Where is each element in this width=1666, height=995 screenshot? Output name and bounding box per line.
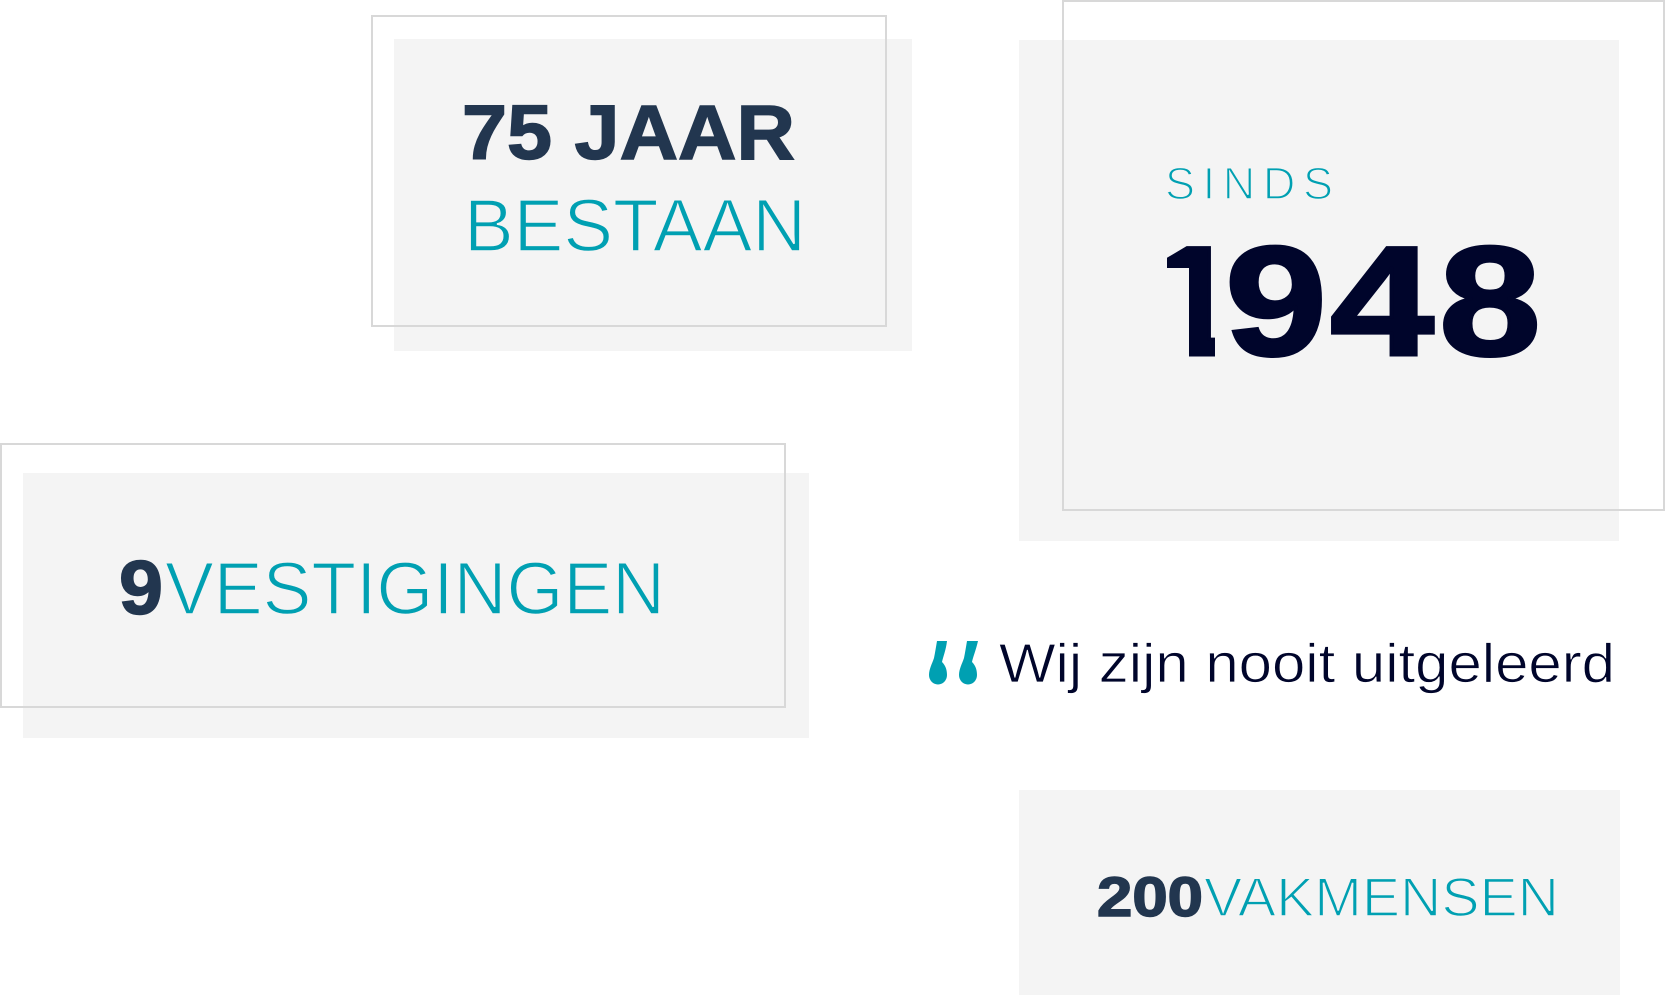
big year: 1948 — [1167, 244, 1538, 358]
number: 9: 9 — [119, 546, 163, 631]
quote — [929, 632, 1615, 694]
panel background — [394, 39, 912, 351]
label: vestigingen: VESTIGINGEN — [165, 547, 665, 630]
panel: sinds 1948 — [1019, 1, 1664, 541]
label: sinds: SINDS — [1165, 158, 1333, 209]
panel: 200 vakmensen — [1019, 790, 1620, 995]
panel background — [1019, 790, 1620, 995]
icon: quotation marks — [929, 641, 978, 685]
subheading: bestaan: BESTAAN — [464, 184, 806, 267]
heading: 75 jaar: 75 JAAR — [462, 90, 795, 176]
panel background — [23, 473, 809, 738]
panel background — [1019, 40, 1619, 541]
big year: 1948: 1 — [1146, 215, 1241, 389]
number: 200: 200 — [1097, 865, 1203, 928]
big year: 1948: 8 — [1439, 215, 1541, 389]
label: vakmensen: VAKMENSEN — [1204, 866, 1559, 928]
panel: 75 jaar bestaan — [372, 16, 912, 351]
big year: 1948: 9 — [1225, 215, 1327, 389]
panel outline — [1, 444, 785, 707]
panel outline — [1063, 1, 1664, 510]
panel outline — [372, 16, 886, 326]
big year: 1948: 4 — [1330, 215, 1434, 389]
panel: 9 vestigingen — [1, 444, 809, 738]
quote text: Wij zijn nooit uitgeleerd — [999, 632, 1615, 694]
